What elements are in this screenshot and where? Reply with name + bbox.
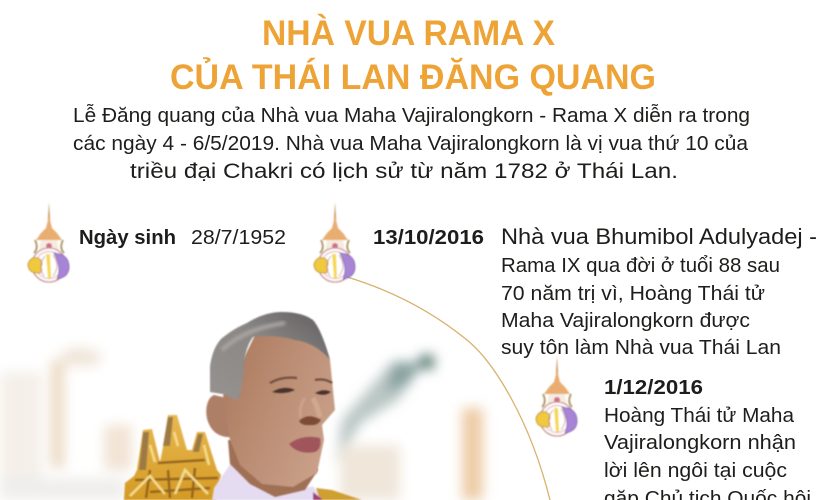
event 13/10/2016: 70 năm trị vì, Hoàng Thái tử — [501, 282, 765, 305]
icon: royal emblem, birth date — [28, 202, 69, 282]
event 1/12/2016: lời lên ngôi tại cuộc — [604, 459, 787, 482]
event 13/10/2016: Nhà vua Bhumibol Adulyadej - — [501, 224, 817, 249]
neck — [228, 440, 318, 497]
event 13/10/2016: Maha Vajiralongkorn được — [501, 309, 750, 332]
birth date: Ngày sinh — [79, 226, 176, 249]
ear — [206, 395, 236, 437]
event 13/10/2016: 13/10/2016 — [373, 226, 484, 249]
event 13/10/2016: suy tôn làm Nhà vua Thái Lan — [501, 336, 781, 359]
intro text: các ngày 4 - 6/5/2019. Nhà vua Maha Vajiralongkorn là vị vua thứ 10 của — [73, 132, 749, 155]
portrait of King Vajiralongkorn — [124, 312, 362, 500]
eyebrows and eyes — [270, 378, 332, 418]
nose — [299, 416, 321, 425]
event 13/10/2016: Rama IX qua đời ở tuổi 88 sau — [501, 254, 780, 277]
event 13/10/2016 — [373, 224, 817, 359]
intro text — [73, 104, 750, 183]
icon: royal emblem, 1/12/2016 — [536, 356, 577, 436]
golden crown ornament — [124, 415, 221, 500]
event 1/12/2016: Vajiralongkorn nhận — [604, 431, 796, 454]
mouth — [289, 437, 320, 453]
uniform and collar — [212, 463, 362, 500]
intro text: triều đại Chakri có lịch sử từ năm 1782 ở Thái Lan. — [130, 159, 678, 183]
intro text: Lễ Đăng quang của Nhà vua Maha Vajiralongkorn - Rama X diễn ra trong — [73, 104, 750, 127]
title: CỦA THÁI LAN ĐĂNG QUANG — [170, 57, 656, 97]
title — [170, 13, 656, 97]
face — [223, 330, 335, 487]
birth date: 28/7/1952 — [191, 226, 286, 249]
background photo: blurred palace scenery — [0, 348, 483, 500]
hair — [210, 312, 330, 401]
icon: royal emblem, 13/10/2016 — [314, 202, 355, 282]
event 1/12/2016: Hoàng Thái tử Maha — [604, 404, 795, 427]
timeline arc — [347, 277, 550, 500]
event 1/12/2016: 1/12/2016 — [604, 376, 703, 399]
mask: white area right of the timeline arc — [347, 200, 825, 500]
title: NHÀ VUA RAMA X — [262, 13, 556, 53]
event 1/12/2016 — [604, 376, 811, 500]
birth date — [79, 226, 286, 249]
